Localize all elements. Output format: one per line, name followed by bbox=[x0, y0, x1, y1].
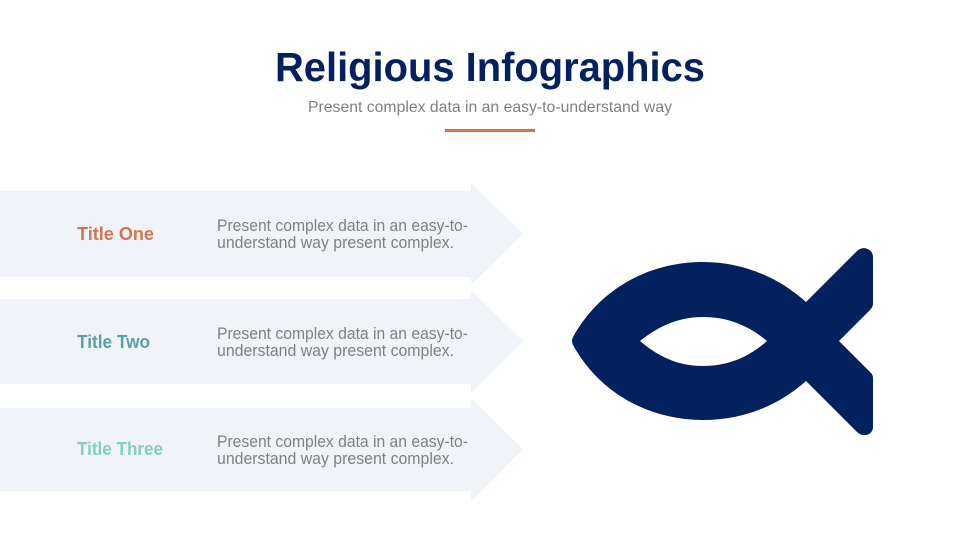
text block one: Present complex data in an easy-to- bbox=[217, 217, 468, 235]
arrow shape three bbox=[0, 398, 523, 502]
heading: title one: Title One bbox=[77, 223, 154, 244]
arrow shape one bbox=[0, 183, 523, 285]
text block two: Present complex data in an easy-to- bbox=[217, 325, 468, 343]
panel: arrow two bbox=[0, 290, 523, 393]
text block two: understand way present complex. bbox=[217, 342, 454, 360]
text block one: understand way present complex. bbox=[217, 234, 454, 252]
title underline bbox=[445, 129, 535, 132]
arrow shape two bbox=[0, 290, 523, 393]
panel: arrow three bbox=[0, 398, 523, 502]
title: Religious Infographics bbox=[275, 44, 705, 90]
heading: title two: Title Two bbox=[77, 331, 150, 352]
text block three: understand way present complex. bbox=[217, 450, 454, 468]
subtitle: Present complex data in an easy-to-understand way bbox=[308, 99, 672, 116]
icon: ichthys fish bbox=[572, 248, 873, 435]
text block three: Present complex data in an easy-to- bbox=[217, 433, 468, 451]
panel: arrow one bbox=[0, 183, 523, 285]
heading: title three: Title Three bbox=[77, 438, 163, 459]
